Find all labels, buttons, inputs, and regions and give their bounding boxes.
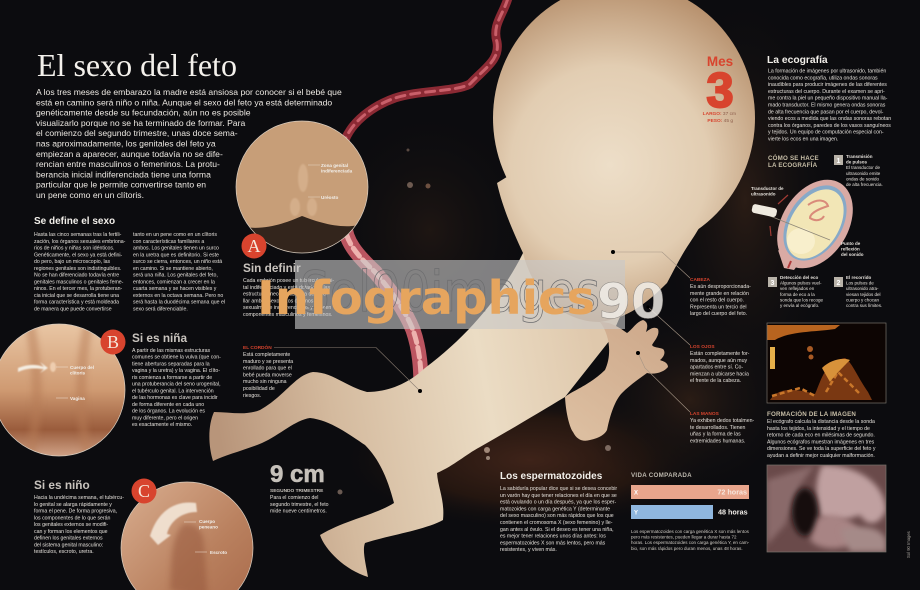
diagram labels [751,186,864,257]
section: sin definir: sexualmente indiferenciados y poseen [243,305,331,311]
section: los espermatozoides [500,471,617,553]
diagram labels: del sonido [841,252,864,257]
heading and text: formación de la imagen [767,410,876,459]
step 1: de pulsos [846,160,868,165]
step 3: forma de eco a la [780,292,815,297]
panel: circle B girl: Cuerpo del [70,365,94,370]
section: si es niña: Si es niña [132,331,188,345]
section: se define el sexo: forma característica y está moldeada [34,300,119,306]
chart note: horas. Los espermatozoides con carga genética Y, en cam- [631,540,750,545]
section: los espermatozoides: es mejor tener relaciones unos días antes: los [500,534,606,540]
photo credit: Sol 90 Images [906,531,911,558]
section: si es niña: de los órganos. La evolución es [132,409,205,415]
section: la ecografía: de alta frecuencia que pasan por el cuerpo, devol- [768,109,884,115]
callout: los ojos: el frente de la cabeza. [690,378,741,384]
bar chart: vida comparada: 72 horas [717,488,747,496]
callout: los ojos: Están completamente for- [690,351,750,357]
callout: los ojos: LOS OJOS [690,344,715,350]
diagram labels: Punto de [841,241,861,246]
intro text: nas aproximadamente, los genitales del feto ya [36,138,216,148]
section: la ecografía: conocida como ecografía, utiliza ondas sonoras [768,75,878,81]
callout: el cordón: maduro y se presenta [243,359,293,365]
section: si es niño: can y forman los elementos que [34,529,108,535]
callout: las manos [636,351,754,444]
ultrasound image 1 [767,323,886,403]
section: la ecografía: vierte los ecos en una imagen. [768,136,838,142]
panel: circle C boy: peneano [199,524,218,530]
heading and text: formación de la imagen: ayudan a definir mejor cualquier malformación. [767,453,875,459]
callout: los ojos: apartados entre sí. Co- [690,365,743,371]
stat: 9 cm [270,461,329,515]
section: se define el sexo: será una niña. Los genitales del feto, [133,272,218,278]
section: los espermatozoides: resistentes, y viven más. [500,547,557,553]
section: si es niño: testículos, escroto, uretra. [34,549,94,555]
intro text: A los tres meses de embarazo la madre está ansiosa por conocer si el bebé que [36,87,342,97]
section: los espermatozoides: contienen el cromosoma X (sexo femenino) y lle- [500,520,613,526]
section: los espermatozoides: La sabiduría popular dice que si se desea concebir [500,486,617,492]
intro text: empiezan a aparecer, aunque todavía no se dife- [36,149,223,159]
section: sin definir: Cada embrión posee un tubérculo geni- [243,278,334,284]
panel: circle A genital zone [235,121,370,260]
stat: 9 cm: Para el comienzo del [270,495,318,501]
section: si es niño: lo genital se alarga rápidamente y [34,502,112,508]
section: sin definir: estructuras necesarias para desarro- [243,292,328,298]
section: se define el sexo: con características familiares a [133,239,204,245]
section: si es niño: Si es niño [34,478,90,492]
section: si es niña: el tubérculo genital. La intervención [132,388,214,394]
ultrasound image 2 [767,465,886,552]
watermark: Infographics [257,271,595,325]
title: El sexo del feto [37,47,237,83]
panel: circle B girl [0,324,125,456]
callout: las manos: Ya exhiben dedos totalmen- [690,418,754,424]
section: se define el sexo: externos en la octava semana. Pero no [133,293,223,299]
section: los espermatozoides: matozoides con carga genética Y (determinante [500,506,610,512]
section: los espermatozoides: Los espermatozoides [500,471,603,482]
step 2: El recorrido [846,275,872,280]
umbilical cord [345,0,508,389]
section: sin definir: llar ambos sexos. Los órganos se [243,298,320,304]
section: se define el sexo: zación, los órganos sexuales embriona- [34,239,126,245]
step 1: ondas de sonido [846,176,880,181]
step 3: 3 [771,280,775,287]
panel: circle B girl: Vagina [70,396,85,401]
badge C: C [138,481,150,501]
callout: el cordón: EL CORDÓN [243,343,272,351]
section: la ecografía: y tejidos. Un equipo de computación especial con- [768,130,884,136]
diagram labels: Transductor de [751,186,784,191]
intro text: particular que le permite convertirse tanto en [36,180,206,190]
section: si es niña: de las hormonas es clave para incidir [132,395,218,401]
section: los espermatozoides: un varón hay que tener relaciones el día en que se [500,493,617,499]
chart note: pero más resistentes, pueden llegar a durar hasta 72 [631,535,737,540]
section: si es niña: de forma diferente en cada uno [132,402,204,408]
callout: cabeza: largo del cuerpo del feto. [690,311,747,317]
badge B [100,330,126,354]
heading and text: formación de la imagen: El ecógrafo calcula la distancia desde la sonda [767,419,875,425]
callout: cabeza [611,250,751,317]
step 1: El transductor de [846,165,881,170]
step 2: ultrasonido atra- [846,286,879,291]
month label [703,54,736,124]
stat: 9 cm: 9 cm [270,461,325,488]
section: se define el sexo: tanto en un pene como en un clítoris [133,232,217,238]
diagram: ultrasound on uterus [751,166,868,282]
section: sin definir: componentes masculinos y femeninos. [243,312,332,318]
callout: las manos: uñas y la forma de las [690,432,741,438]
step 2: cuerpo y chocan [846,297,880,302]
step 1: 1 [837,158,841,165]
section: si es niño: Hacia la undécima semana, el tubércu- [34,495,124,501]
callout: los ojos: mados, aunque aún muy [690,358,748,364]
step 1 [834,154,883,187]
section: se define el sexo: de manera que puede convertirse [34,306,112,312]
heading and text: formación de la imagen: retorno de cada eco en milésimas de segundo. [767,433,875,439]
step 2: viesan tejidos del [846,292,881,297]
month label: LARGO: 37 cm [703,111,736,117]
section: la ecografía: contra los órganos, paredes de los vasos sanguíneos [768,123,891,129]
section: la ecografía: inaudibles para producir imágenes de las diferentes [768,82,887,88]
bar chart: vida comparada: X [634,490,638,496]
heading: cómo se hace la ecografía: CÓMO SE HACE [768,154,819,162]
heading and text: formación de la imagen: Algunos ecógrafos muestran imágenes en tres [767,439,875,445]
section: se define el sexo: Se define el sexo [34,216,115,227]
intro text: genéticamente desde su fecundación, aún no es posible [36,108,251,118]
callout: el cordón: riesgos. [243,393,261,399]
step 2: 2 [837,280,841,287]
stat: 9 cm: mide nueve centímetros. [270,509,327,515]
fetus body and legs [209,240,640,577]
callout: cabeza: Representa un tercio del [690,304,747,310]
section: la ecografía: me contra la piel un pequeño dispositivo manual lla- [768,96,888,102]
section: se define el sexo: do pero, bajo un microscopio, las [34,259,111,265]
section: la ecografía: La ecografía [767,55,828,66]
section: se define el sexo: surco se cierra, entonces, un niño está [133,259,222,265]
section: se define el sexo: genitales masculinos o genitales feme- [34,279,124,285]
intro text: el comienzo del segundo trimestre, unas doce sema- [36,128,238,138]
section: se define el sexo: Hasta las cinco semanas tras la fertili- [34,232,122,238]
badge B: B [107,332,119,352]
step 1: ultrasonido emite [846,171,881,176]
intro text: visualizarlo porque no se ha terminado de formar. Para [36,118,245,128]
callout: cabeza: mente grande en relación [690,291,749,297]
section: se define el sexo: entonces, comienzan a crecer en la [133,279,215,285]
section: si es niño: del sistema genital masculino: [34,542,103,548]
chart note: Los espermatozoides con carga genética X son más lentos [631,529,750,534]
section: los espermatozoides: gan antes al óvulo. Si el deseo es tener una niña, [500,527,614,533]
section: la ecografía: estructuras del cuerpo. Durante el examen se apri- [768,89,885,95]
callout: el cordón: bebé pueda moverse [243,372,292,378]
step 3: sonda que los recoge [780,297,824,302]
section: si es niño: los componentes de lo que serán [34,515,111,521]
heading and text: formación de la imagen: FORMACIÓN DE LA IMAGEN [767,410,856,418]
section: se define el sexo: cuarta semana y se hacen visibles y [133,286,217,292]
section: si es niña: ris comienza a formarse a partir de [132,375,212,381]
fetus arm and hand [565,320,668,441]
callout: el cordón [243,343,422,399]
section: se define el sexo: será hasta la duodécima semana que el [133,300,225,306]
callout: el cordón: posibilidad de [243,386,275,392]
step 3: ven reflejados en [780,286,815,291]
step 2: contra sus límites. [846,303,882,308]
section: si es niña: una protuberancia del seno urogenital, [132,382,221,388]
step 3: Algunos pulsos vuel- [780,281,822,286]
section: los espermatozoides: está ovulando o un día después, ya que los esper- [500,500,616,506]
callout: el cordón: enrollado para que el [243,366,292,372]
section: se define el sexo: Genéticamente, el sexo ya está defini- [34,252,123,258]
bar chart: vida comparada: 48 horas [718,508,748,516]
badge A [242,234,266,258]
section: la ecografía [767,55,891,142]
section: sin definir: tal indiferenciado y está dotado de las [243,285,330,291]
month label: 3 [706,64,734,118]
month label: Mes [707,54,733,69]
section: si es niña [132,331,221,428]
section: si es niña: comunes se obtiene la vulva (que con- [132,355,221,361]
section: la ecografía: viendo ecos a medida que las ondas sonoras rebotan [768,116,891,122]
step 2 [834,275,882,308]
watermark: 90 [597,274,665,330]
section: se define el sexo: No se han diferenciado todavía entre [34,272,119,278]
section: si es niña: A partir de las mismas estructuras [132,348,211,354]
step 1: Transmisión [846,154,873,159]
section: se define el sexo [34,216,225,312]
section: la ecografía: La formación de imágenes por ultrasonido, también [768,68,886,74]
section: si es niño: los genitales externos se modifi- [34,522,108,528]
section: se define el sexo: rios de niños y niñas son idénticos. [34,246,114,252]
panel: circle C boy: Cuerpo [199,519,215,524]
section: se define el sexo: ninos. En el tercer mes, la protuberan- [34,286,123,292]
panel: circle C boy [121,482,253,590]
diagram labels: reflexión [841,247,860,252]
callout: el cordón: mucho sin ninguna [243,379,287,385]
panel: circle A genital zone: indiferenciada [321,168,353,174]
callout: cabeza: con el resto del cuerpo. [690,298,744,304]
panel: circle A genital zone: Zona genital [321,163,348,168]
heading and text: formación de la imagen: dimensiones. Se ve toda la superficie del feto y [767,446,876,452]
section: se define el sexo: ambos. Los genitales tienen un surco [133,246,219,252]
section: si es niño: forma el pene. De forma progresiva, [34,508,117,514]
section: se define el sexo: regiones genitales son indistinguibles. [34,266,121,272]
badge A: A [248,236,260,256]
section: si es niño [34,478,124,555]
section: se define el sexo: en camino. Si se mantiene abierto, [133,266,213,272]
watermark: Sol90images [300,260,600,325]
callout: las manos: extremidades humanas. [690,438,745,444]
callout: los ojos: mienzan a ubicarse hacia [690,371,749,377]
chart note: bio, son más rápidos pero duran menos, unas 48 horas. [631,546,743,551]
heading: cómo se hace la ecografía: LA ECOGRAFÍA [768,161,818,169]
fetus head [493,0,755,322]
panel: circle B girl: clítoris [70,370,86,376]
step 1: de alta frecuencia. [846,182,883,187]
bar chart: vida comparada [631,472,749,519]
callout: cabeza: CABEZA [690,277,711,283]
intro text: está en camino será niño o niña. Aunque el sexo del feto ya está determinado [36,97,332,107]
section: la ecografía: mado transductor. El mismo genera ondas sonoras [768,102,886,108]
section: se define el sexo: en la uretra que es definitorio. Si este [133,252,219,258]
panel: circle A genital zone: Uréosto [321,195,339,200]
section: los espermatozoides: espermatozoides X son más lentos, pero más [500,540,606,546]
callout: las manos: te desarrollados. Tienen [690,425,745,431]
intro text: berancia inicial indiferenciada tiene una forma [36,169,211,179]
heading and text: formación de la imagen: hasta los tejidos, la intensidad y el tiempo de [767,426,870,432]
callout: los ojos [646,305,750,384]
diagram labels: ultrasonido [751,192,776,197]
section: sin definir [243,261,334,318]
step 3: Detección del eco [780,275,819,280]
stat: 9 cm: SEGUNDO TRIMESTRE [270,488,324,494]
intro text: un pene como en un clítoris. [36,190,144,200]
callout: cabeza: Es aún desproporcionada- [690,284,751,290]
section: los espermatozoides: del sexo masculino) son más rápidos que los que [500,513,614,519]
badge C [132,478,156,504]
panel: circle C boy: Escroto [210,550,227,555]
section: si es niña: tiene aberturas separadas para la [132,361,210,367]
callout: el cordón: Está completamente [243,352,290,358]
section: sin definir: Sin definir [243,261,301,275]
section: si es niño: definen los genitales externos [34,536,103,542]
intro text: rencian entre masculinos o femeninos. La protu- [36,159,220,169]
stat: 9 cm: segundo trimestre, el feto [270,502,329,508]
section: se define el sexo: cia inicial que se desarrolla tiene una [34,293,119,299]
section: si es niña: vagina y la uretra) y la vagina. El clíto- [132,368,220,374]
section: si es niña: muy diferente, pero el origen [132,415,198,421]
callout: las manos: LAS MANOS [690,411,720,417]
bar chart: vida comparada: VIDA COMPARADA [631,472,692,479]
step 2: Los pulsos de [846,281,874,286]
step 3 [768,275,824,308]
section: si es niña: es exactamente el mismo. [132,422,192,428]
month label: PESO: 45 g [707,118,733,124]
bar chart: vida comparada: Y [634,510,638,516]
step 3: y envía al ecógrafo. [780,303,819,308]
section: se define el sexo: sexo será diferenciable. [133,306,188,312]
